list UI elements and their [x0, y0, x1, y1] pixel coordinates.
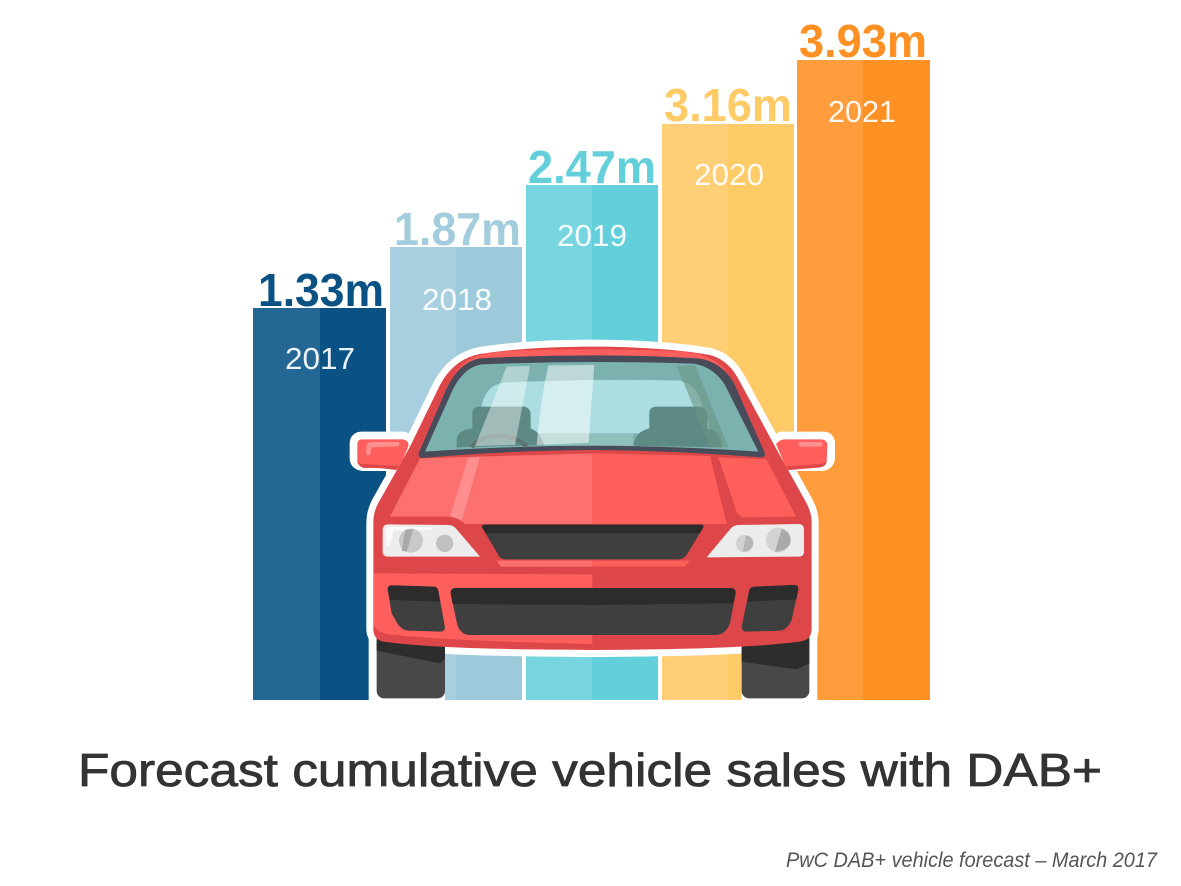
- wing mirrors: [357, 439, 827, 470]
- cabin interior: [482, 380, 712, 433]
- icon: red car, front view: [357, 347, 827, 700]
- steering wheel: [472, 436, 527, 447]
- bar 2021: [797, 15, 930, 700]
- value 3.93m: 3.93m: [799, 15, 927, 67]
- car body: [373, 347, 812, 650]
- roof highlight: [455, 349, 728, 373]
- windshield light reflections: [475, 366, 530, 446]
- headlights: [383, 524, 804, 557]
- title: Forecast cumulative vehicle sales with DAB+: [78, 744, 1102, 796]
- source note: PwC DAB+ vehicle forecast – March 2017: [786, 849, 1158, 872]
- windshield: [419, 355, 765, 458]
- bar 2019: [526, 141, 658, 700]
- value 2.47m: 2.47m: [528, 141, 656, 193]
- year 2019: 2019: [557, 218, 627, 253]
- grille: [482, 525, 703, 567]
- bar 2018: [390, 203, 522, 700]
- value 3.16m: 3.16m: [664, 79, 792, 131]
- hood: [390, 453, 796, 524]
- year 2021: 2021: [828, 94, 896, 129]
- white sticker outline: [357, 347, 827, 700]
- lower bumper: [373, 573, 592, 644]
- seats: [457, 407, 544, 447]
- year 2017: 2017: [285, 341, 355, 376]
- lower air vents: [388, 585, 798, 635]
- bar 2017: [253, 264, 386, 700]
- bar 2020: [662, 79, 794, 700]
- wheels: [377, 635, 809, 698]
- year 2020: 2020: [694, 157, 764, 192]
- value 1.33m: 1.33m: [258, 264, 384, 316]
- year 2018: 2018: [422, 282, 492, 317]
- value 1.87m: 1.87m: [394, 203, 521, 255]
